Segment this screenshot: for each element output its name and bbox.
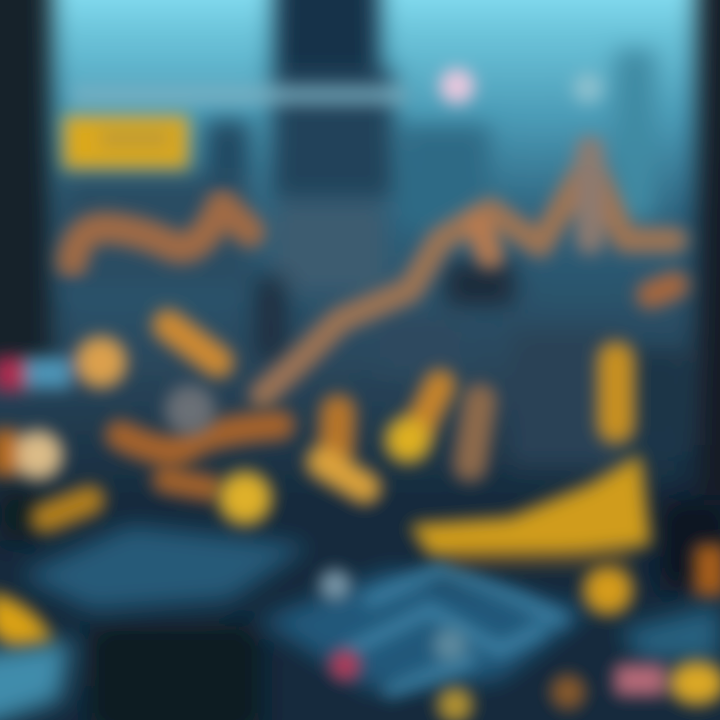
blue platform shapes <box>0 490 720 720</box>
yellow title block <box>64 116 188 168</box>
brighter tiles in the lower right <box>350 570 560 690</box>
orange line chart upper left <box>72 205 250 262</box>
candlesticks and orange arrows <box>45 325 616 518</box>
coins and small markers <box>0 337 632 720</box>
bottom accents <box>0 545 720 704</box>
skyline towers <box>0 0 720 500</box>
yellow area chart <box>410 455 650 566</box>
heading band and pink badge <box>72 69 603 105</box>
rising orange line chart <box>262 150 675 395</box>
